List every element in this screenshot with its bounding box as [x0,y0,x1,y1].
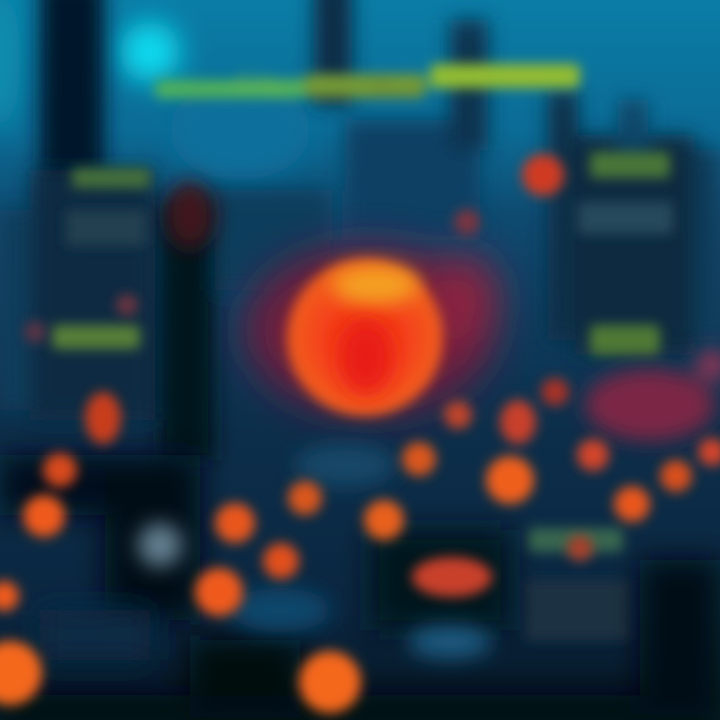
label: left upper [66,168,150,246]
central glow halo [245,245,499,415]
title: City energy network [236,66,485,96]
foreground blue patches [138,443,492,658]
skyline towers [0,0,720,460]
central orange circle [287,260,443,416]
red node top right [522,154,564,196]
dark red tower top [166,181,214,249]
label: left middle [52,325,140,349]
label: right middle [590,325,660,355]
label: right upper [578,152,673,234]
orange nodes [0,209,720,713]
red cluster right [585,349,720,441]
cyan glow [0,0,310,180]
dark foreground bands [0,455,720,720]
label: bottom right [525,528,630,640]
title [155,64,580,98]
